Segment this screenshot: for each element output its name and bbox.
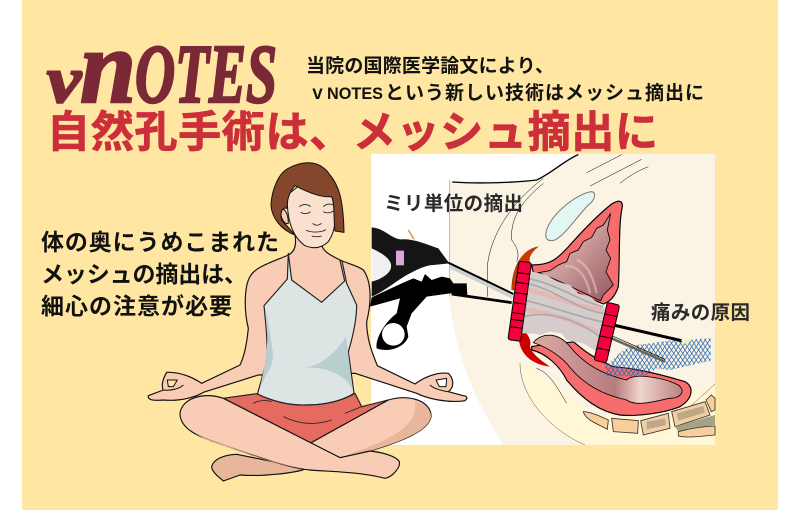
- spine vertebrae: [583, 395, 715, 437]
- red muscle upper: [512, 247, 538, 290]
- text block: intro: [306, 54, 704, 104]
- right leg: [310, 398, 431, 458]
- retractor ring upper: [508, 261, 532, 341]
- white picture area: [371, 154, 715, 445]
- hand finger details: [163, 378, 448, 392]
- arms and torso: [148, 235, 467, 401]
- heading: vNOTES logo: [47, 8, 277, 125]
- lower organ lumen: [533, 335, 682, 403]
- text block: intro: 当院の国際医学論文により、: [306, 54, 554, 77]
- label: millimeter extraction: ミリ単位の摘出: [384, 193, 523, 215]
- retractor ring lower: [594, 302, 620, 363]
- text block: intro: ｖ: [309, 83, 326, 104]
- left leg and foot: [180, 396, 399, 478]
- text block: left caption: メッシュの摘出は、: [41, 261, 247, 287]
- lower organ wall: [532, 342, 691, 415]
- ear: [281, 209, 288, 224]
- mesh: [605, 338, 711, 377]
- text block: intro: NOTES: [327, 84, 383, 103]
- heading: vNOTES logo: v: [47, 44, 82, 117]
- title: 自然孔手術は、メッシュ摘出に: [47, 109, 658, 157]
- body contour lines: [449, 155, 715, 445]
- text block: left caption: [41, 229, 279, 319]
- shorts: [223, 393, 388, 443]
- text block: intro: という新しい技術はメッシュ摘出に: [385, 81, 704, 104]
- laparoscopic forceps shaft: [448, 263, 693, 362]
- tank top: [257, 253, 357, 405]
- facial features: [299, 204, 334, 237]
- laparoscopic instrument body: [370, 227, 467, 350]
- panel: anatomy illustration: [370, 154, 715, 445]
- retracted tract: [520, 272, 605, 352]
- neck and face: [287, 185, 335, 248]
- upper organ lumen: [538, 213, 613, 301]
- text block: left caption: 細心の注意が必要: [41, 293, 232, 319]
- heading: vNOTES logo: n: [80, 8, 136, 125]
- hair: [271, 163, 344, 235]
- lower foot: [212, 454, 307, 481]
- text block: left caption: 体の奥にうめこまれた: [41, 229, 279, 255]
- cyst shape: [546, 192, 595, 241]
- pelvic floor soft tissue: [520, 363, 715, 445]
- label: cause of pain: 痛みの原因: [651, 301, 750, 324]
- body cross-section background: [449, 154, 715, 445]
- red muscle lower: [518, 333, 550, 367]
- upper organ wall: [532, 201, 622, 304]
- figure: meditating woman: [148, 163, 467, 481]
- heading: vNOTES logo: OTES: [135, 28, 277, 121]
